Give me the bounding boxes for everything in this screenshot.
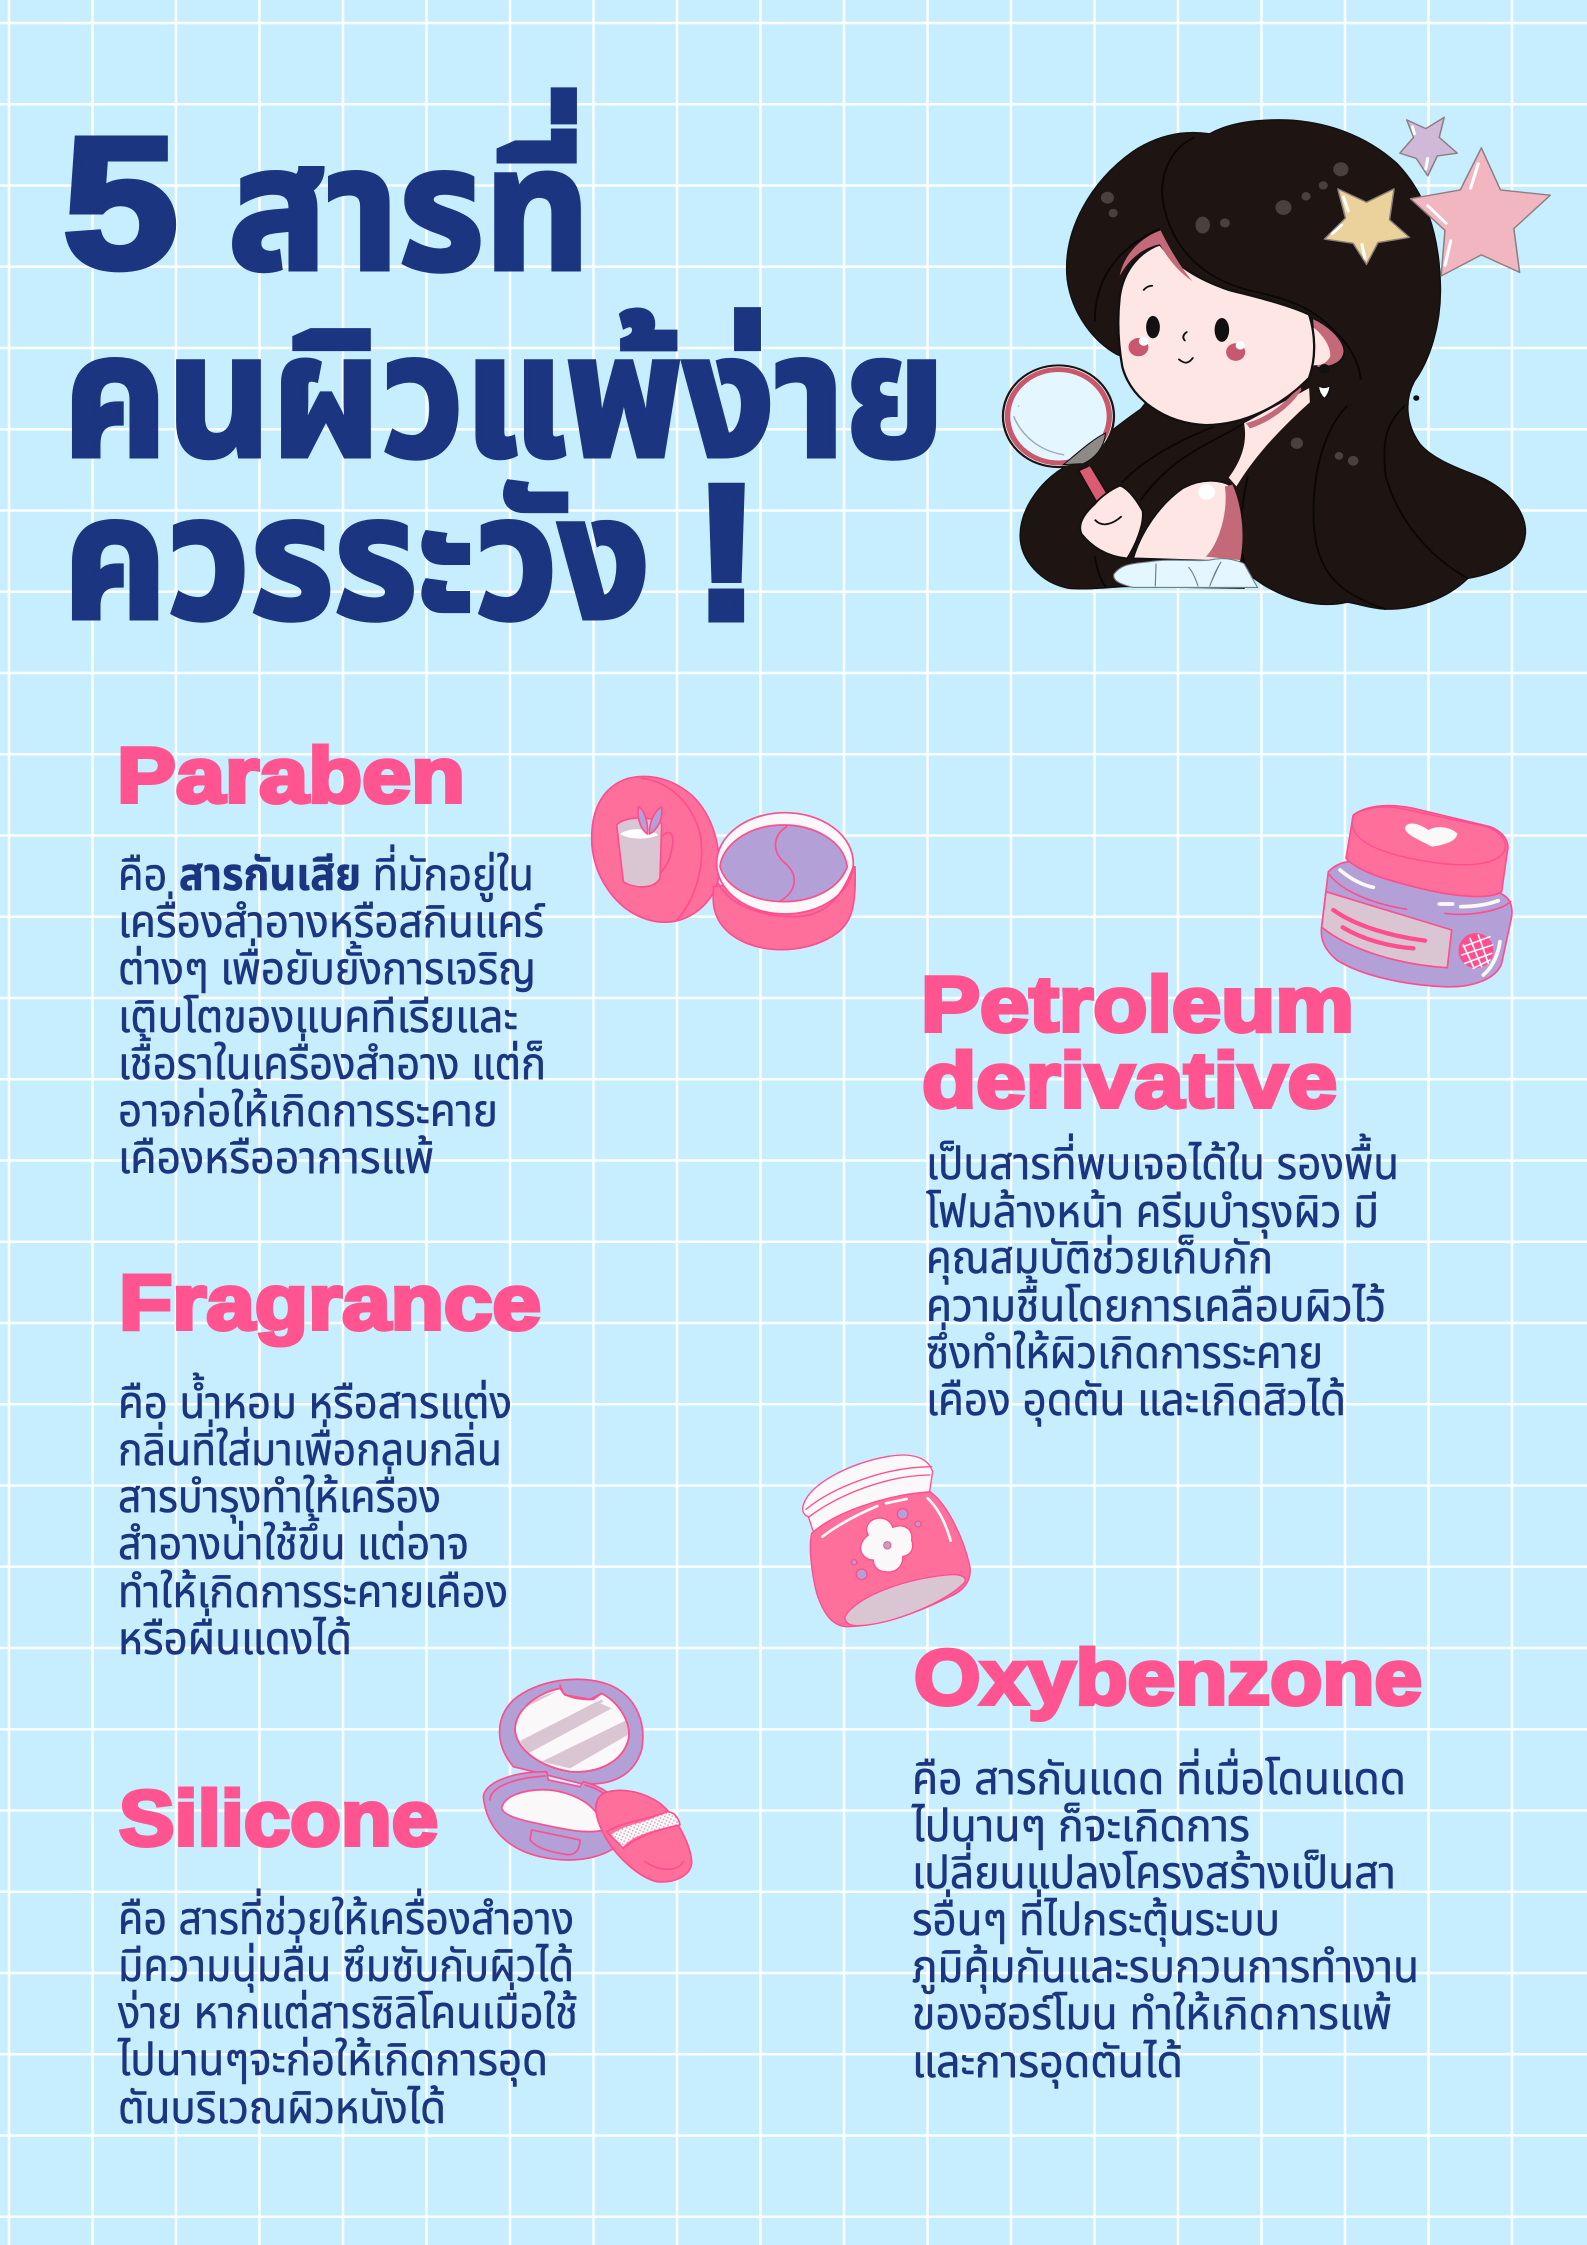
flower <box>861 1518 913 1572</box>
text block: Oxybenzone description: ภูมิคุ้มกันและรบกวนการทำงาน <box>912 1941 1419 1994</box>
text block: Fragrance description: ทำให้เกิดการระคายเคือง <box>118 1566 508 1617</box>
dots <box>851 1509 921 1580</box>
text block: Paraben description: เคืองหรืออาการแพ้ <box>118 1132 434 1183</box>
text block: Paraben description: คือ สารกันเสีย ที่มักอยู่ใน <box>118 844 534 902</box>
body <box>810 1492 970 1627</box>
hand <box>1080 486 1143 558</box>
heading: Silicone: Silicone <box>119 1774 438 1862</box>
text block: Fragrance description: คือ น้ำหอม หรือสารแต่ง <box>118 1372 512 1428</box>
text block: Petroleum description: คุณสมบัติช่วยเก็บกัก <box>926 1232 1273 1285</box>
heading: Petroleum derivative <box>921 960 1354 1124</box>
face <box>1118 244 1314 425</box>
cap <box>803 1455 933 1532</box>
panel: Fragrance <box>118 1258 541 1664</box>
title: ! <box>695 447 758 659</box>
heading: Petroleum derivative: derivative <box>922 1036 1337 1124</box>
heading: Oxybenzone: Oxybenzone <box>914 1633 1422 1721</box>
text block: Silicone description: มีความนุ่มลื่น ซึมซับกับผิวได้ <box>118 1935 574 1993</box>
text block: Silicone description <box>117 1888 578 2133</box>
text block: Paraben description: อาจก่อให้เกิดการระคาย <box>118 1085 498 1136</box>
text block: Silicone description: ง่าย หากแต่สารซิลิโคนเมื่อใช้ <box>118 1982 578 2038</box>
text block: Fragrance description: กลิ่นที่ใส่มาเพื่อกลบกลิ่น <box>118 1419 502 1475</box>
title: 5 <box>63 100 178 307</box>
highlights <box>1340 870 1500 975</box>
earring <box>1318 385 1330 399</box>
text block: Silicone description: คือ สารที่ช่วยให้เครื่องสำอาง <box>118 1888 574 1944</box>
text block: Oxybenzone description: คือ สารกันแดด ที่เมื่อโดนแดด <box>912 1748 1406 1804</box>
text block: Silicone description: ไปนานๆจะก่อให้เกิดการอุด <box>117 2034 548 2087</box>
label <box>1322 892 1452 968</box>
ear <box>1312 318 1344 368</box>
panel: Silicone <box>117 1774 578 2133</box>
text block: Oxybenzone description: และการอุดตันได้ <box>912 2036 1183 2089</box>
lid <box>592 777 719 922</box>
stars <box>1324 117 1550 276</box>
text block: Petroleum description: ซึ่งทำให้ผิวเกิดการระคาย <box>926 1322 1323 1378</box>
text block: Oxybenzone description <box>911 1748 1419 2089</box>
heading: Paraben: Paraben <box>117 731 465 819</box>
text block: Fragrance description: สารบำรุงทำให้เครื่อง <box>118 1466 441 1524</box>
jar body <box>1321 861 1512 987</box>
purple patches <box>720 825 847 902</box>
text block: Petroleum description: ความชื้นโดยการเคลือบผิวไว้ <box>926 1275 1386 1331</box>
icon: compact and puff <box>483 1679 692 1882</box>
eyes, cheeks and mouth <box>1146 316 1160 338</box>
text block: Paraben description: เติบโตของแบคทีเรียและ <box>118 991 518 1042</box>
icon: open eye-patch jar <box>592 777 855 950</box>
text block: Oxybenzone description: รอื่นๆ ที่ไปกระตุ้นระบบ <box>912 1889 1280 1947</box>
mug <box>660 832 673 873</box>
icon: heart jar <box>1321 806 1512 987</box>
panel: Petroleum derivative <box>921 960 1399 1427</box>
panel: Oxybenzone <box>911 1633 1422 2089</box>
ruffle <box>1114 559 1257 587</box>
jar base <box>713 867 855 950</box>
text block: Petroleum description: เคือง อุดตัน และเกิดสิวได้ <box>926 1374 1346 1427</box>
text block: Petroleum description: โฟมล้างหน้า ครีมบำรุงผิว มี <box>926 1186 1379 1239</box>
compact base <box>483 1772 620 1860</box>
heading: Fragrance: Fragrance <box>119 1258 541 1346</box>
text block: Petroleum description: เป็นสารที่พบเจอได้ใน รองพื้น <box>926 1133 1399 1189</box>
base <box>845 1575 965 1626</box>
text block: Paraben description: เครื่องสำอางหรือสกินแคร์ <box>118 891 545 947</box>
icon: flower jar <box>803 1455 970 1627</box>
text block: Oxybenzone description: ไปนานๆ ก็จะเกิดการ <box>911 1800 1250 1851</box>
text block: Paraben description <box>118 844 546 1183</box>
text block: Fragrance description <box>118 1372 512 1664</box>
text block: Fragrance description: หรือผื่นแดงได้ <box>118 1608 352 1664</box>
hair <box>1020 120 1525 609</box>
neck <box>1229 388 1310 486</box>
heart <box>1405 824 1457 847</box>
text block: Silicone description: ตันบริเวณผิวหนังได้ <box>118 2082 446 2133</box>
title <box>63 89 945 659</box>
title: ควรระวัง <box>63 463 650 655</box>
hair highlights <box>1101 162 1358 466</box>
title: คนผิวแพ้ง่าย <box>63 301 945 493</box>
powder <box>502 1790 603 1832</box>
magnifier <box>1003 365 1114 502</box>
jar ring <box>717 813 853 914</box>
text block: Fragrance description: สำอางน่าใช้ขึ้น แต่อาจ <box>118 1513 469 1569</box>
mesh dot <box>1459 934 1493 967</box>
text block: Oxybenzone description: เปลี่ยนแปลงโครงสร้างเป็นสา <box>912 1842 1396 1898</box>
text block: Paraben description: ต่างๆ เพื่อยับยั้งการเจริญ <box>118 938 536 994</box>
leaves <box>638 807 662 834</box>
lid <box>1346 806 1508 896</box>
heading: Petroleum derivative: Petroleum <box>921 960 1354 1048</box>
panel: Paraben <box>117 731 546 1183</box>
puff <box>596 1790 692 1882</box>
text block: Paraben description: เชื้อราในเครื่องสำอาง แต่ก็ <box>118 1033 546 1089</box>
title: สารที่ <box>228 89 590 306</box>
arm <box>1133 481 1241 562</box>
highlights <box>822 1498 951 1541</box>
text block: Petroleum description <box>926 1133 1399 1427</box>
text block: Oxybenzone description: ของฮอร์โมน ทำให้เกิดการแพ้ <box>912 1988 1392 2039</box>
mirror lid <box>500 1679 643 1784</box>
illustration: girl with magnifying glass <box>1003 117 1550 609</box>
